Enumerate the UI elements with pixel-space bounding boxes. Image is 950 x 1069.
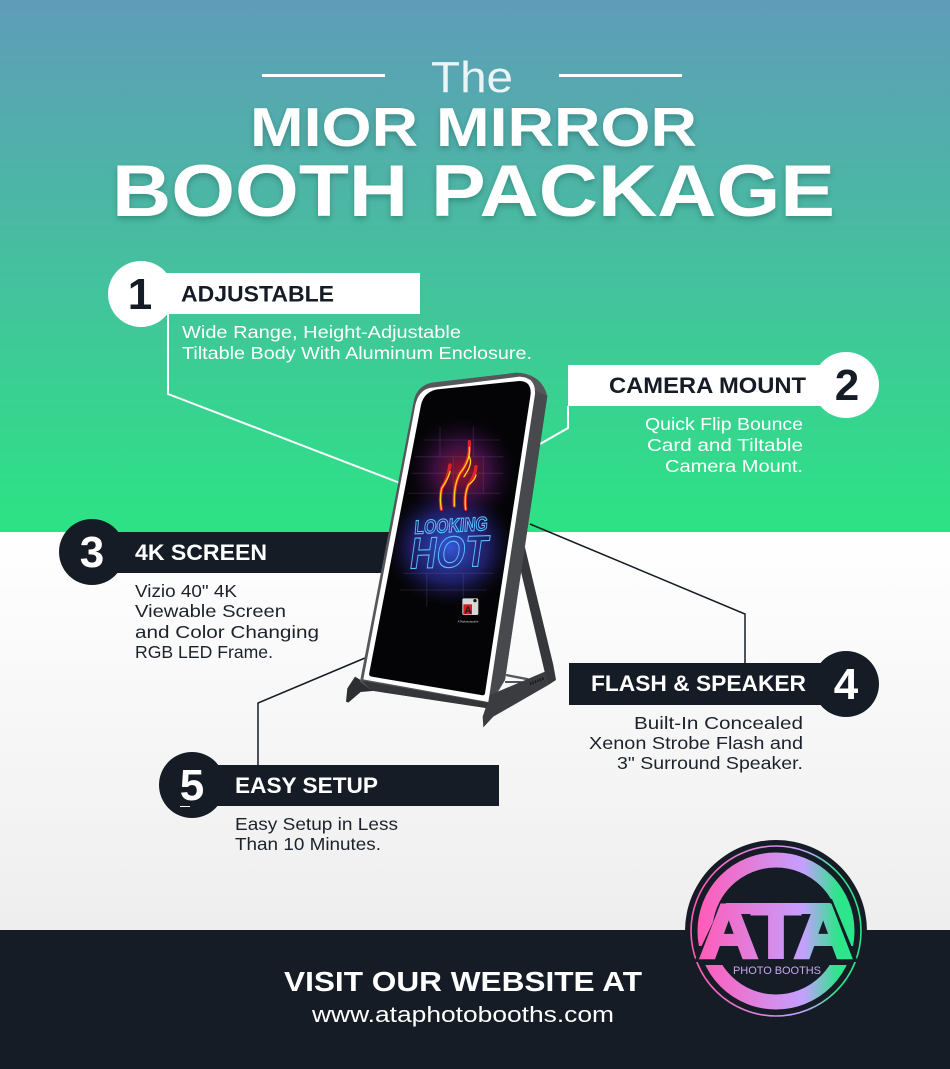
footer text: www.ataphotobooths.com — [311, 1002, 614, 1027]
panel 4: flash and speaker: FLASH & SPEAKER — [591, 671, 806, 696]
panel 5: easy setup — [159, 752, 499, 854]
rear stand leg — [517, 547, 556, 685]
stand cross bars — [505, 675, 528, 682]
panel 2: camera mount: CAMERA MOUNT — [609, 373, 807, 398]
logo: ATA photo booths — [685, 840, 867, 1022]
right base foot — [483, 672, 548, 727]
panel 3: 4K screen: RGB LED Frame. — [135, 642, 273, 662]
logo: ATA photo booths: ATA — [700, 889, 852, 973]
body shell — [360, 373, 547, 708]
panel 1: adjustable: ADJUSTABLE — [181, 282, 334, 306]
panel 5: easy setup: Easy Setup in Less — [235, 814, 398, 834]
background: green gradient top — [0, 0, 950, 532]
panel 3: 4K screen: Viewable Screen — [135, 601, 286, 621]
panel 3: 4K screen: 3 — [80, 528, 104, 577]
neon text: looking hot — [410, 516, 491, 570]
LED frame — [363, 377, 535, 702]
mirror booth device — [346, 373, 556, 727]
panel 2: camera mount: Card and Tiltable — [647, 435, 803, 455]
panel 2: camera mount: Quick Flip Bounce — [645, 414, 803, 434]
logo: ATA photo booths: PHOTO BOOTHS — [733, 965, 821, 977]
title: The — [431, 53, 513, 102]
footer text — [284, 966, 642, 1027]
panel 3: 4K screen: and Color Changing — [135, 622, 319, 642]
panel 5: easy setup: Than 10 Minutes. — [235, 834, 381, 854]
shell bottom edge — [362, 681, 488, 708]
panel 2: camera mount — [568, 352, 879, 476]
title: MIOR MIRROR — [250, 96, 697, 158]
neon text: looking hot: HOT — [407, 527, 492, 579]
panel 3: 4K screen: 4K SCREEN — [135, 540, 267, 565]
title: BOOTH PACKAGE — [112, 151, 835, 232]
panel 2: camera mount: 2 — [835, 361, 859, 410]
small brand badge: ATAphotobooths — [458, 620, 479, 624]
panel 4: flash and speaker: Xenon Strobe Flash and — [589, 733, 803, 753]
neon flame — [440, 442, 476, 509]
panel 5: easy setup: 5 — [180, 761, 204, 810]
small brand badge — [458, 598, 479, 624]
panel 1: adjustable: Wide Range, Height-Adjustable — [182, 322, 461, 342]
small brand badge: A — [464, 605, 472, 616]
vent slots — [530, 678, 544, 684]
panel 1: adjustable — [108, 261, 532, 363]
panel 4: flash and speaker: 4 — [834, 660, 859, 709]
screen artwork — [392, 424, 510, 623]
connector lines — [168, 314, 745, 766]
panel 4: flash and speaker: 3" Surround Speaker. — [617, 753, 803, 773]
panel 3: 4K screen — [59, 519, 392, 662]
shell side shade — [488, 390, 547, 703]
background: light lower area — [0, 532, 950, 930]
footer text: VISIT OUR WEBSITE AT — [284, 966, 642, 997]
panel 4: flash and speaker — [569, 651, 879, 773]
footer band — [0, 930, 950, 1069]
panel 1: adjustable: 1 — [128, 270, 152, 319]
title — [112, 53, 835, 232]
panel 2: camera mount: Camera Mount. — [665, 456, 803, 476]
panel 1: adjustable: Tiltable Body With Aluminum Enclosure. — [182, 343, 532, 363]
neon text: looking hot: LOOKING — [414, 513, 489, 539]
left base foot — [346, 677, 377, 703]
panel 4: flash and speaker: Built-In Concealed — [634, 713, 803, 733]
screen — [369, 381, 531, 695]
panel 3: 4K screen: Vizio 40" 4K — [135, 581, 237, 601]
panel 5: easy setup: EASY SETUP — [235, 773, 378, 798]
